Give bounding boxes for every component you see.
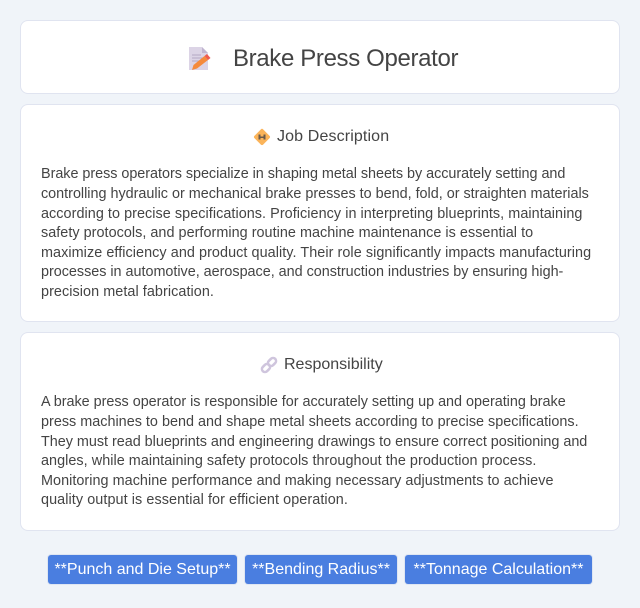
text block: description	[41, 166, 591, 300]
skill tag row	[47, 554, 593, 585]
text block: description: maximize efficiency and product quality. Their role significantly impacts manufacturing	[41, 245, 591, 261]
heading text: Job Description	[277, 128, 389, 145]
heading text: Responsibility	[284, 356, 383, 373]
icon: warning diamond	[254, 128, 270, 146]
text block: responsibility: press machines to bend and shape metal sheets according to precise specifications.	[41, 414, 579, 430]
tag: tonnage calculation: **Tonnage Calculation**	[414, 561, 583, 578]
text block: description: Brake press operators specialize in shaping metal sheets by accurately setting and	[41, 166, 565, 182]
text block: responsibility: A brake press operator is responsible for accurately setting up and operating brake	[41, 394, 566, 410]
heading: job description	[254, 128, 389, 146]
panel: job description	[20, 104, 620, 322]
tag: tonnage calculation	[405, 555, 592, 584]
text block: responsibility: Monitoring machine performance and making necessary adjustments to achieve	[41, 473, 554, 489]
text block: responsibility: quality output is essential for efficient operation.	[41, 492, 348, 508]
text block: description: controlling hydraulic or mechanical brake presses to bend, fold, or straighten materials	[41, 186, 589, 202]
panel: title card	[20, 20, 620, 94]
tag: punch and die setup	[48, 555, 237, 584]
text block: description: safety protocols, and performing routine machine maintenance is essential to	[41, 225, 533, 241]
tag: bending radius	[245, 555, 397, 584]
text block: description: precision metal fabrication.	[41, 284, 214, 300]
icon: chain link	[260, 356, 278, 374]
title: Brake Press Operator	[233, 45, 458, 72]
text block: responsibility: They must read blueprints and engineering drawings to ensure correct positioning and	[41, 434, 587, 450]
panel: responsibility	[20, 332, 620, 531]
tag: bending radius: **Bending Radius**	[252, 561, 390, 578]
heading: responsibility	[260, 356, 383, 374]
text block: responsibility: angles, while maintaining safety protocols throughout the production process.	[41, 453, 536, 469]
text block: description: processes in automotive, aerospace, and construction industries by ensuring high-	[41, 264, 563, 280]
text block: responsibility	[41, 394, 587, 508]
tag: punch and die setup: **Punch and Die Setup**	[54, 561, 231, 578]
text block: description: according to precise specifications. Proficiency in interpreting blueprints, maintaining	[41, 206, 582, 222]
icon: document with pencil	[189, 47, 210, 70]
